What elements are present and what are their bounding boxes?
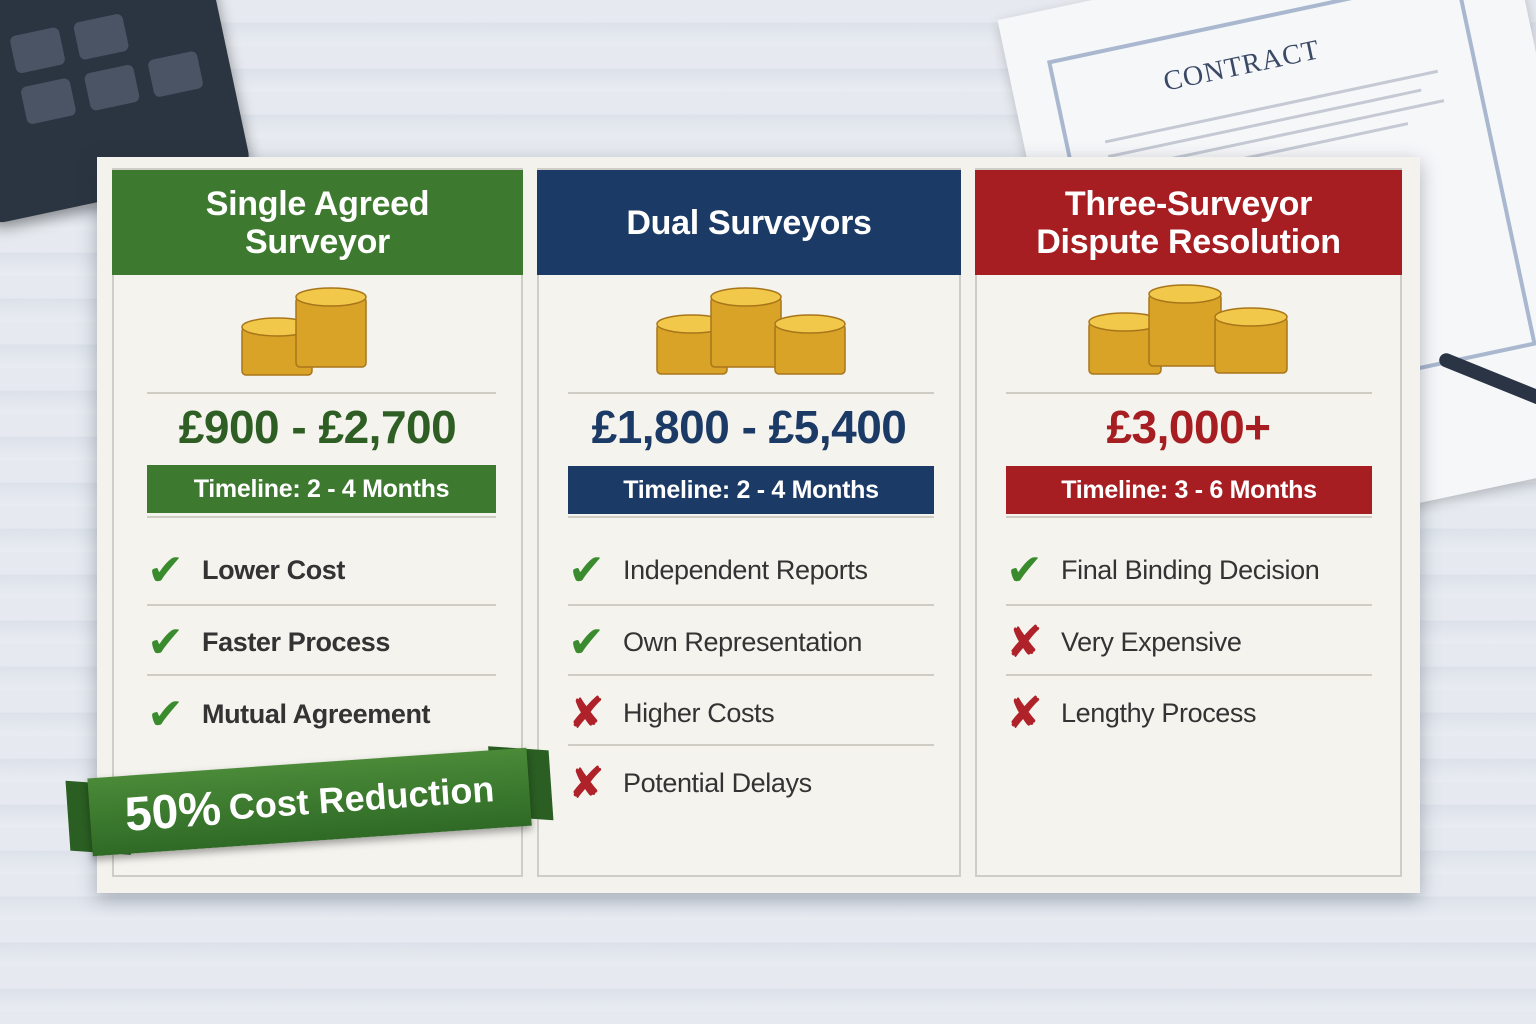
panel: single agreed surveyor [112, 168, 523, 877]
timeline [1006, 466, 1372, 514]
pros and cons list [1006, 546, 1372, 738]
pros list: ✔ [147, 546, 183, 594]
calculator [0, 0, 252, 225]
callout: 50% cost reduction ribbon: 50% [123, 782, 223, 841]
pros and cons list: Very Expensive [1061, 626, 1242, 656]
pros list: ✔ [147, 690, 183, 738]
timeline [568, 466, 934, 514]
callout: 50% cost reduction ribbon [66, 746, 554, 864]
pen [1437, 351, 1536, 413]
price: £1,800 - £5,400 [592, 401, 906, 453]
pros and cons list: ✘ [568, 688, 604, 738]
pros and cons list: ✘ [1006, 688, 1042, 738]
pros and cons list: ✔ [1006, 546, 1042, 594]
pros and cons list [568, 546, 934, 808]
pros list: Faster Process [202, 626, 390, 656]
timeline: Timeline: 2 - 4 Months [194, 474, 449, 502]
pros and cons list: Lengthy Process [1061, 698, 1256, 728]
timeline: Timeline: 3 - 6 Months [1061, 476, 1317, 504]
pros and cons list: ✘ [568, 758, 604, 808]
pros and cons list: ✔ [568, 546, 604, 594]
heading: Surveyor [245, 222, 390, 260]
panel: three-surveyor dispute resolution [975, 168, 1402, 877]
heading [112, 170, 523, 275]
heading: Single Agreed [206, 184, 429, 222]
timeline: Timeline: 2 - 4 Months [623, 476, 879, 504]
panel: dual surveyors [537, 168, 961, 877]
pros and cons list: Independent Reports [623, 554, 868, 584]
pros list: Lower Cost [202, 554, 345, 584]
heading: Dual Surveyors [626, 204, 872, 242]
pros and cons list: ✔ [568, 618, 604, 666]
icon: coins [1088, 284, 1288, 375]
price: £900 - £2,700 [179, 401, 456, 453]
icon: coins [241, 287, 367, 376]
board [97, 157, 1420, 893]
pros and cons list: Potential Delays [623, 768, 812, 798]
pros and cons list: Higher Costs [623, 698, 774, 728]
pros list: ✔ [147, 618, 183, 666]
callout: 50% cost reduction ribbon: Cost Reduction [227, 768, 496, 828]
pros and cons list: ✘ [1006, 618, 1042, 666]
contract document: CONTRACT [1161, 34, 1323, 98]
pros list [147, 546, 496, 738]
contract document [997, 0, 1536, 568]
heading [975, 170, 1402, 275]
pros and cons list: Own Representation [623, 626, 862, 656]
price: £3,000+ [1106, 401, 1271, 453]
heading: Three-Surveyor [1065, 184, 1312, 222]
pros list: Mutual Agreement [202, 698, 430, 728]
icon: coins [656, 287, 846, 375]
heading [537, 170, 961, 275]
timeline [147, 465, 496, 513]
heading: Dispute Resolution [1036, 222, 1341, 260]
pros and cons list: Final Binding Decision [1061, 554, 1319, 584]
